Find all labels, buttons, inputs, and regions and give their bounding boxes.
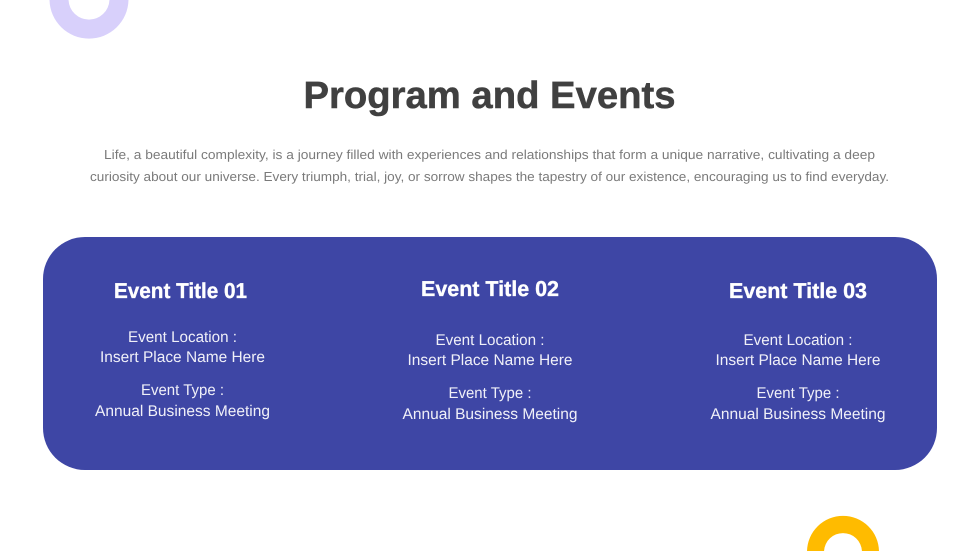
event column 03 — [710, 279, 886, 423]
event column 02: Event Location : — [436, 332, 544, 349]
event column 02: Annual Business Meeting — [402, 406, 578, 423]
icon: lavender ring, top left — [50, 0, 128, 39]
event column 03: Insert Place Name Here — [716, 352, 880, 369]
event column 01 — [95, 279, 270, 420]
event column 03: Event Location : — [744, 332, 852, 349]
event column 01: Event Title 01 — [114, 279, 247, 303]
icon: yellow ring, bottom right — [807, 516, 879, 551]
title: Program and Events — [304, 75, 676, 117]
intro paragraph: curiosity about our universe. Every triumph, trial, joy, or sorrow shapes the tapestry of our existence, encouraging us to find everyday. — [90, 169, 889, 184]
event column 01: Event Type : — [141, 382, 224, 399]
panel background — [43, 237, 937, 470]
intro paragraph — [90, 147, 889, 184]
event column 03: Annual Business Meeting — [710, 406, 886, 423]
panel: events — [43, 237, 937, 470]
event column 01: Insert Place Name Here — [100, 349, 265, 366]
event column 02 — [402, 277, 578, 423]
event column 03: Event Type : — [756, 385, 840, 402]
event column 02: Insert Place Name Here — [408, 352, 572, 369]
intro paragraph: Life, a beautiful complexity, is a journey filled with experiences and relationships that form a unique narrative, cultivating a deep — [104, 147, 875, 162]
event column 03: Event Title 03 — [729, 279, 867, 303]
event column 01: Annual Business Meeting — [95, 403, 270, 420]
event column 02: Event Type : — [448, 385, 532, 402]
event column 02: Event Title 02 — [421, 277, 559, 301]
event column 01: Event Location : — [128, 329, 237, 346]
